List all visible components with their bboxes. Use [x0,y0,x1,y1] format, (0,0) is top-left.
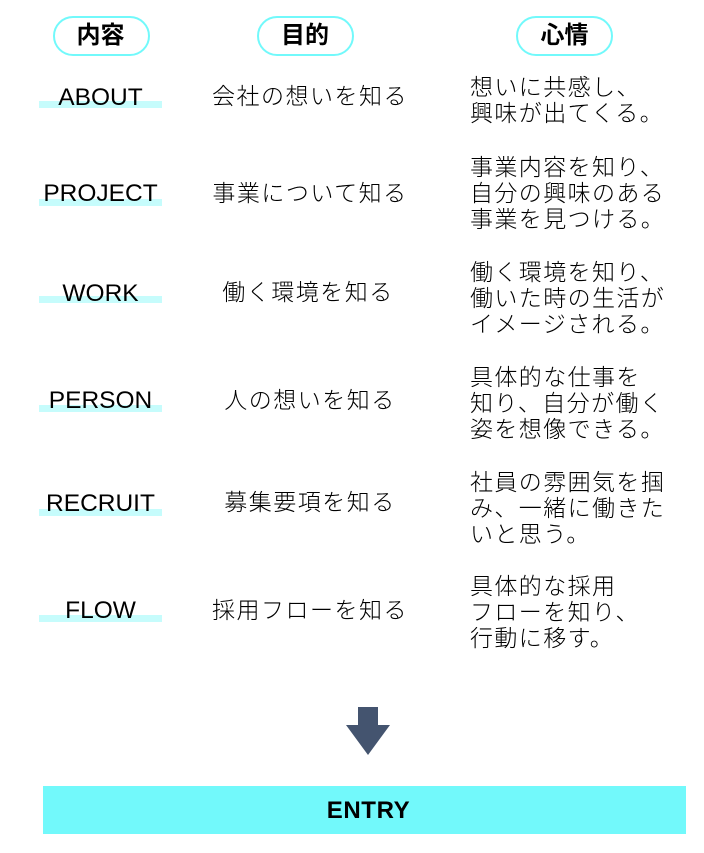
text: 具体的な採用 [470,573,616,599]
heading pill: 内容: 内容 [76,22,124,49]
row: RECRUIT [39,469,665,547]
row: PERSON [39,364,665,442]
arrow: down [346,707,390,755]
text: 知り、自分が働く [470,390,664,416]
text: RECRUIT [46,490,155,517]
text: PROJECT [43,180,158,207]
text: 会社の想いを知る [212,83,408,109]
text: PERSON [49,387,152,414]
text: イメージされる。 [470,311,665,337]
heading pill: 心情: 心情 [540,22,588,49]
heading pill: 目的 [257,16,354,56]
text: 働いた時の生活が [470,285,665,311]
text: 募集要項を知る [224,489,396,515]
text: ABOUT [58,84,143,111]
text: 想いに共感し、 [470,74,641,100]
text: FLOW [65,597,136,624]
row: PROJECT [39,154,665,232]
text: 人の想いを知る [224,387,396,413]
heading pill: 目的: 目的 [281,22,329,49]
text: いと思う。 [470,521,591,547]
text: 採用フローを知る [212,597,408,623]
text: 事業を見つける。 [470,206,665,232]
heading pill: 心情 [516,16,613,56]
row: WORK [39,259,665,337]
text: 行動に移す。 [470,625,614,651]
text: 働く環境を知る [222,279,394,305]
text: 働く環境を知り、 [470,259,664,285]
text: 姿を想像できる。 [470,416,665,442]
text: 事業内容を知り、 [470,154,664,180]
text: み、一緒に働きた [470,495,665,521]
text: フローを知り、 [470,599,640,625]
button: ENTRY [43,786,686,834]
row: FLOW [39,573,640,651]
button: ENTRY: ENTRY [327,797,410,824]
row: ABOUT [39,74,664,126]
text: 事業について知る [212,180,408,206]
text: 社員の雰囲気を掴 [470,469,665,495]
text: 興味が出てくる。 [470,100,664,126]
heading pill: 内容 [53,16,150,56]
text: 具体的な仕事を [470,364,641,390]
text: 自分の興味のある [470,180,665,206]
text: WORK [62,280,139,307]
